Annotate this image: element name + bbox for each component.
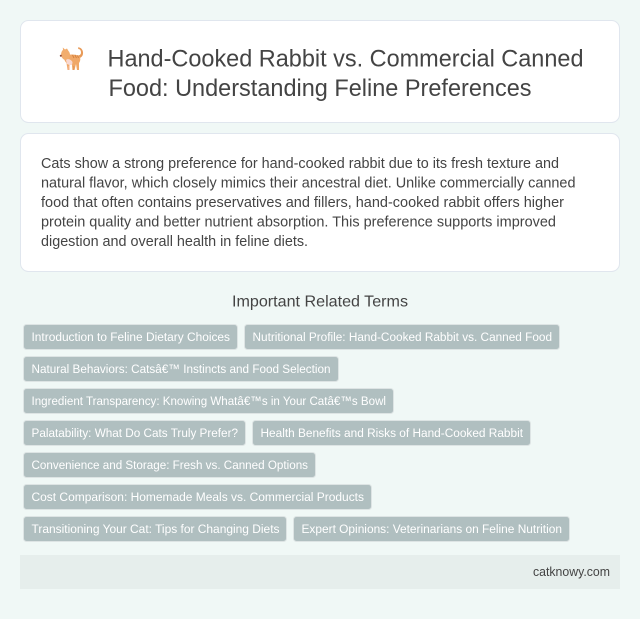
- tag: [252, 420, 530, 446]
- tag: [24, 324, 238, 350]
- footer: [20, 555, 620, 589]
- tag: Expert Opinions: Veterinarians on Feline Nutrition: [302, 522, 562, 536]
- text block: summary: Cats show a strong preference for hand-cooked rabbit due to its fresh texture and: [41, 156, 559, 172]
- tag: [24, 452, 316, 478]
- text block: summary: natural flavor, which closely mimics their ancestral diet. Unlike commercially canned: [41, 176, 576, 192]
- tag: Transitioning Your Cat: Tips for Changing Diets: [32, 522, 280, 536]
- panel: tags: [24, 324, 570, 542]
- text block: summary: [41, 156, 576, 250]
- tag: Introduction to Feline Dietary Choices: [32, 330, 230, 344]
- tag: Natural Behaviors: Catsâ€™ Instincts and Food Selection: [32, 362, 330, 376]
- text block: summary: digestion and overall health in feline diets.: [41, 234, 308, 250]
- panel: title card: [20, 20, 620, 122]
- title: Food: Understanding Feline Preferences: [108, 75, 532, 102]
- heading: related terms: Important Related Terms: [232, 294, 408, 310]
- tag: Palatability: What Do Cats Truly Prefer?: [32, 426, 238, 440]
- tag: [24, 484, 372, 510]
- title: [108, 45, 584, 102]
- tag: [24, 388, 394, 414]
- tag: [24, 356, 338, 382]
- footer source: catknowy.com: [533, 565, 610, 579]
- text block: summary: food that often contains preservatives and fillers, hand-cooked rabbit offers higher: [41, 195, 564, 211]
- icon: cat: [60, 47, 83, 70]
- title: Hand-Cooked Rabbit vs. Commercial Canned: [108, 45, 584, 72]
- tag: [294, 516, 570, 542]
- tag: [244, 324, 560, 350]
- tag: Convenience and Storage: Fresh vs. Canned Options: [32, 458, 308, 472]
- tag: [24, 516, 286, 542]
- panel: summary text: [20, 134, 620, 272]
- tag: Ingredient Transparency: Knowing Whatâ€™s in Your Catâ€™s Bowl: [32, 394, 386, 408]
- tag: [24, 420, 246, 446]
- text block: summary: protein quality and better nutrient absorption. This preference supports improved: [41, 214, 556, 230]
- tag: Cost Comparison: Homemade Meals vs. Commercial Products: [32, 490, 364, 504]
- tag: Health Benefits and Risks of Hand-Cooked Rabbit: [260, 426, 524, 440]
- tag: Nutritional Profile: Hand-Cooked Rabbit vs. Canned Food: [252, 330, 552, 344]
